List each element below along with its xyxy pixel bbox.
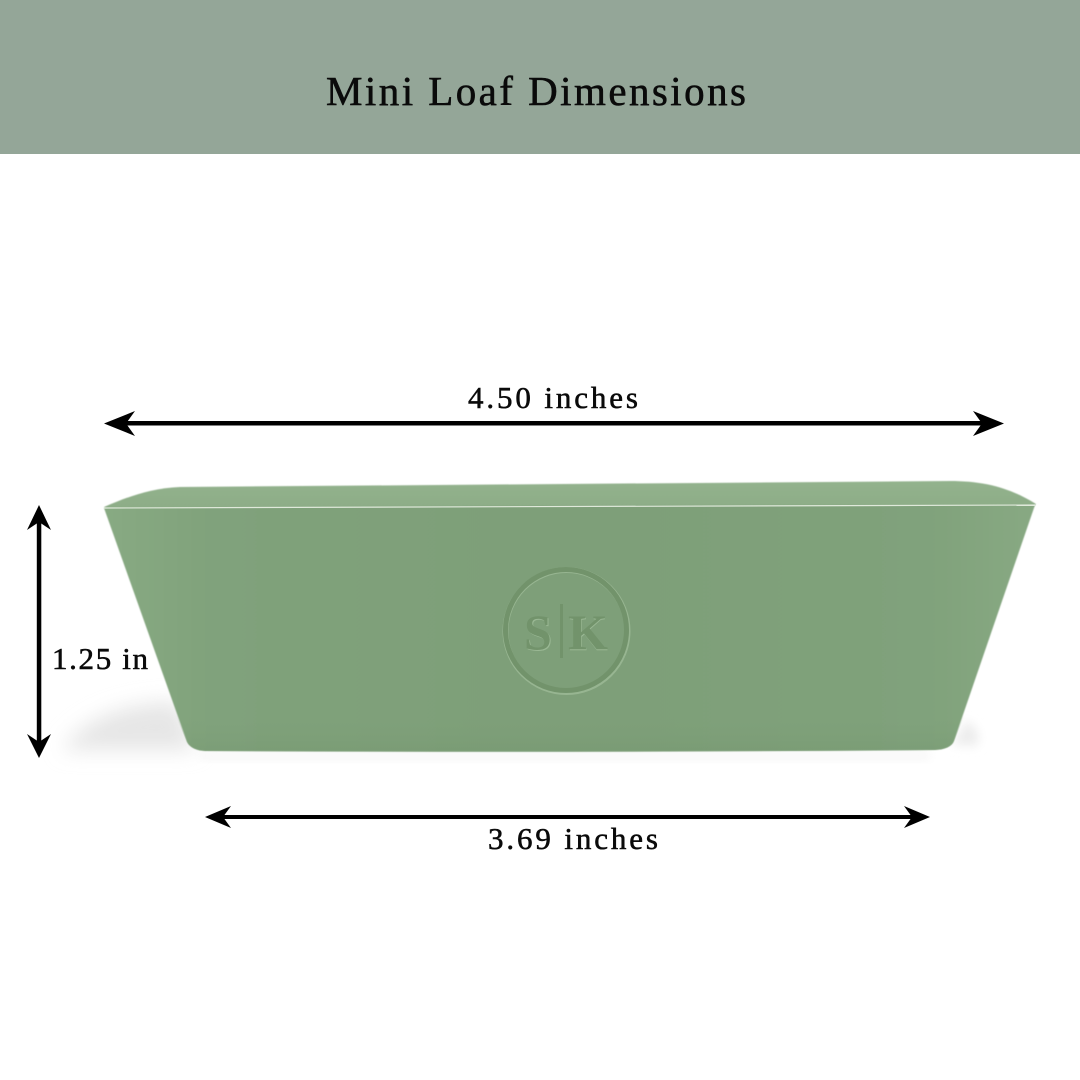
- width arrow: bottom 3.69 inches: [205, 806, 930, 828]
- title: Mini Loaf Dimensions: [326, 68, 746, 114]
- dish front face: [104, 505, 1035, 752]
- dish shadow: [62, 702, 979, 759]
- rim highlight: [104, 505, 1035, 508]
- loaf dish photo: [62, 481, 1036, 759]
- label: top width: 4.50 inches: [468, 380, 638, 415]
- header band: [0, 0, 1080, 154]
- label: bottom width: 3.69 inches: [488, 821, 658, 856]
- embossed logo: [506, 570, 628, 692]
- embossed logo: K: [568, 604, 608, 660]
- width arrow: top 4.50 inches: [104, 411, 1004, 436]
- embossed logo: S: [525, 605, 553, 661]
- label: height: 1.25 in: [52, 641, 148, 676]
- embossed logo: K: [569, 605, 608, 661]
- dish interior and rim: [104, 481, 1036, 512]
- height arrow: 1.25 in: [27, 505, 51, 758]
- dish base shading: [175, 715, 965, 752]
- embossed logo: S: [524, 604, 552, 660]
